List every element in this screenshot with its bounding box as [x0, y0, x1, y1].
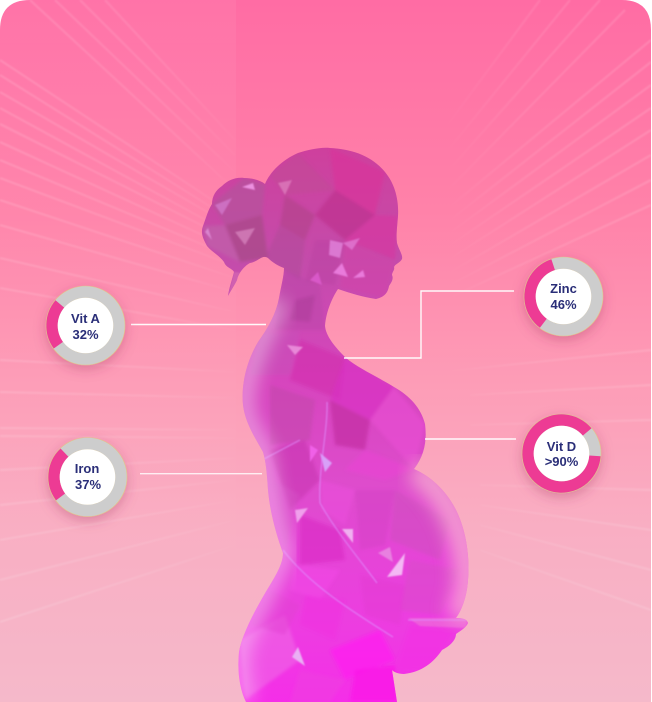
donut: Vit A 32%: Vit A [71, 311, 101, 326]
donut: Iron 37% [41, 430, 134, 524]
connector: Zinc [344, 291, 514, 358]
donut: Vit A 32%: 32% [72, 327, 99, 342]
donut: Vit A 32% [39, 279, 132, 372]
donut: Zinc 46%: 46% [550, 297, 577, 312]
donut: Vit D >90%: Vit D [547, 439, 576, 454]
donut: Zinc 46% [517, 250, 610, 343]
soft fade along the belly [414, 469, 468, 618]
vein lines [262, 402, 466, 637]
donut: Iron 37%: Iron [75, 461, 99, 476]
donut: Vit D >90%: >90% [545, 454, 579, 469]
donut: Iron 37%: 37% [75, 477, 101, 492]
connector: Vit A [131, 324, 266, 326]
donut: Vit D >90% [522, 414, 601, 493]
connector: Iron [140, 473, 262, 475]
pregnant woman silhouette [190, 140, 480, 702]
soft light along the back [238, 300, 283, 702]
connector: Vit D [425, 438, 516, 440]
donut: Zinc 46%: Zinc [550, 281, 577, 296]
bright crystal facets [205, 180, 468, 666]
large tonal facets [203, 148, 460, 702]
